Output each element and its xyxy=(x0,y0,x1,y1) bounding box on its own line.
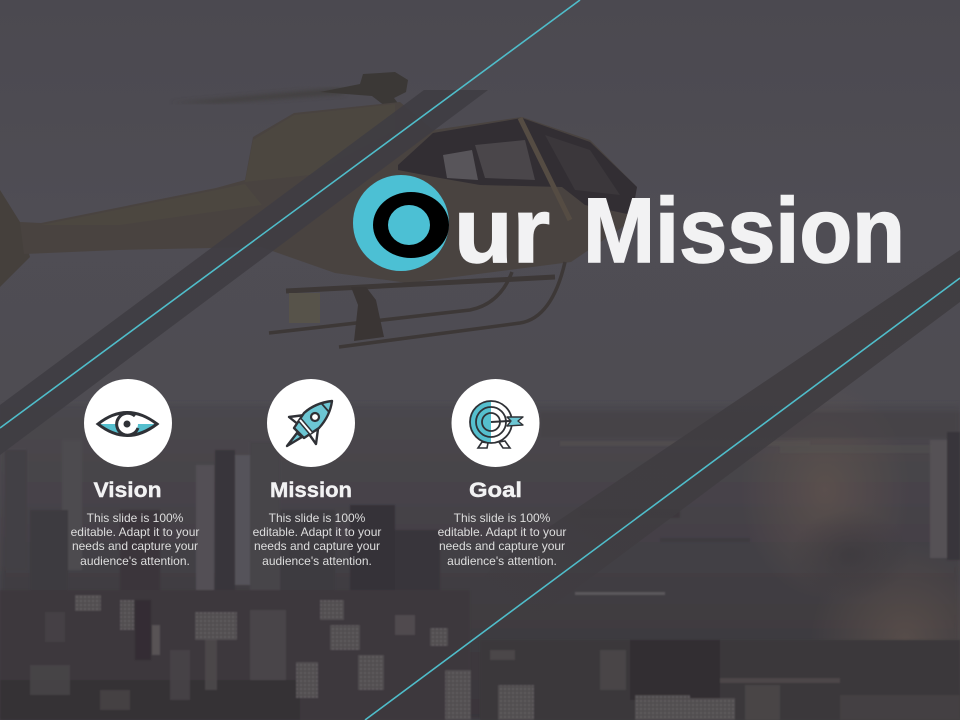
text block: mission: editable. Adapt it to your xyxy=(253,525,381,539)
title text: ur xyxy=(454,180,550,282)
cockpit windows xyxy=(398,118,637,215)
panel: vision xyxy=(71,379,199,568)
text block: goal: audience's attention. xyxy=(447,554,557,568)
heading: goal: Goal xyxy=(469,479,522,502)
dark foreground city xyxy=(0,590,470,720)
door window xyxy=(443,150,478,180)
text block: goal: This slide is 100% xyxy=(454,511,551,525)
engine cowl highlight xyxy=(245,104,395,182)
heading: vision: Vision xyxy=(94,479,162,502)
text block: vision: editable. Adapt it to your xyxy=(71,525,199,539)
boom highlight xyxy=(41,184,262,225)
lit buildings xyxy=(30,595,960,720)
landing strut xyxy=(351,287,384,341)
harbour far shore xyxy=(560,441,810,446)
cockpit frame xyxy=(520,118,570,220)
diagonal band: upper left xyxy=(0,90,488,455)
panel: goal xyxy=(438,379,566,568)
text block: goal: editable. Adapt it to your xyxy=(438,525,566,539)
title xyxy=(353,175,905,282)
icon: target xyxy=(452,379,540,467)
helicopter xyxy=(0,72,637,347)
rotor blade xyxy=(170,88,345,103)
text block: goal: needs and capture your xyxy=(439,539,565,553)
fuselage xyxy=(20,102,637,283)
icon: rocket xyxy=(267,379,355,467)
title text: Mission xyxy=(583,180,905,282)
text block: mission: This slide is 100% xyxy=(269,511,366,525)
diagonal line: lower right xyxy=(365,278,960,720)
landing skids xyxy=(269,262,565,347)
text block: mission: audience's attention. xyxy=(262,554,372,568)
background photo: city and harbour xyxy=(0,380,960,720)
title badge letter O xyxy=(353,175,449,271)
text block: mission: needs and capture your xyxy=(254,539,380,553)
rotor head xyxy=(320,72,408,106)
icon: eye xyxy=(84,379,172,467)
text block: vision: This slide is 100% xyxy=(87,511,184,525)
left skyline xyxy=(5,450,27,570)
camera pod xyxy=(289,293,320,323)
text block: vision: needs and capture your xyxy=(72,539,198,553)
cockpit interior xyxy=(475,140,535,180)
panel: mission xyxy=(253,379,381,568)
diagonal line: upper left xyxy=(0,0,580,428)
heading: mission: Mission xyxy=(270,479,352,502)
tail fin xyxy=(0,190,30,287)
text block: vision: audience's attention. xyxy=(80,554,190,568)
diagonal band: lower right xyxy=(470,250,960,625)
